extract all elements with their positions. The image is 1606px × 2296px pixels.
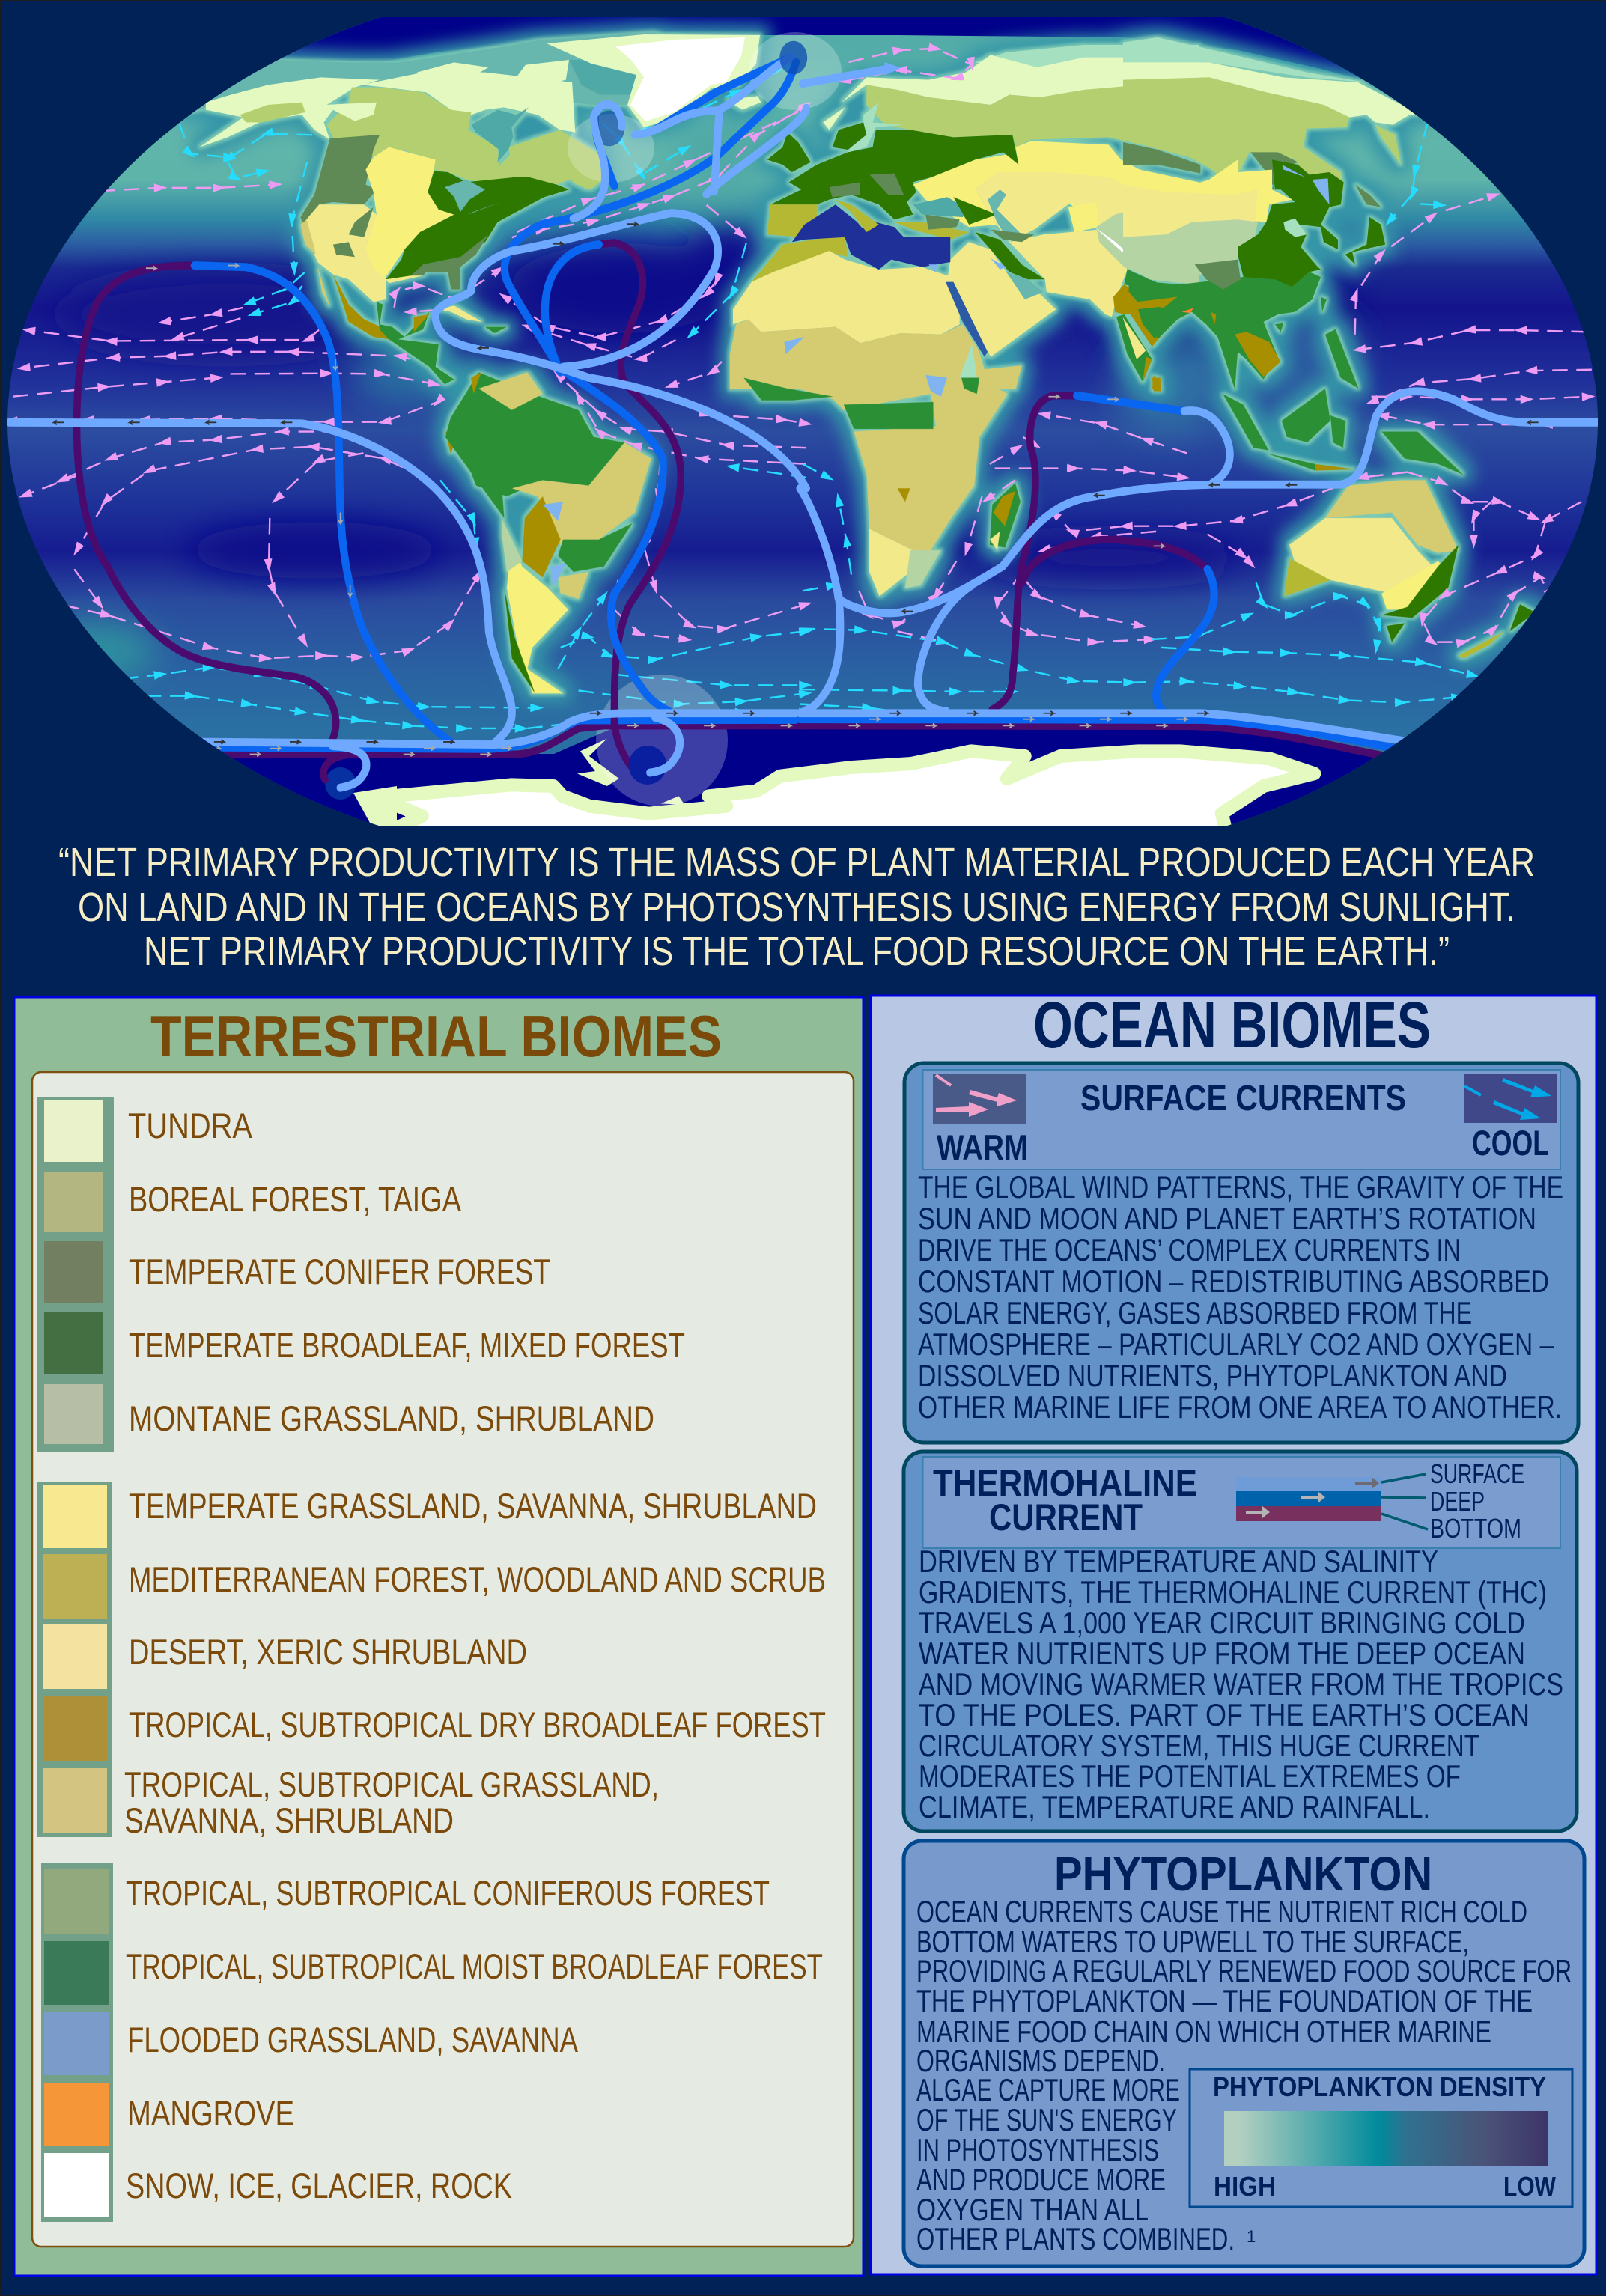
diagram: current depth layers [1236,1458,1524,1544]
panel: ocean biomes [871,989,1596,2274]
North America [187,32,676,384]
thermohaline current, west [9,41,807,800]
label: cool: COOL [1472,1123,1549,1163]
legend group: grasslands and drylands: TEMPERATE GRASSLAND, SAVANNA, SHRUBLAND [129,1486,817,1526]
text: phytoplankton body: ALGAE CAPTURE MORE [916,2072,1180,2107]
legend group: tropical, wetland and ice: SNOW, ICE, GLACIER, ROCK [126,2166,512,2205]
text: surface currents body [918,1169,1563,1425]
Greenland ice sheet and rim [547,34,760,127]
legend group: grasslands and drylands: SAVANNA, SHRUBLAND [124,1800,454,1840]
legend: phytoplankton density [1190,2069,1572,2207]
heading: thermohaline current [933,1462,1197,1538]
heading: thermohaline current: CURRENT [989,1496,1143,1538]
text: thermohaline body [919,1544,1563,1824]
legend group: tropical, wetland and ice: TROPICAL, SUBTROPICAL CONIFEROUS FOREST [126,1873,770,1913]
text: surface currents body: DRIVE THE OCEANS’ COMPLEX CURRENTS IN [918,1232,1461,1267]
diagram: current depth layers: BOTTOM [1430,1513,1521,1544]
surface currents: warm pink and cool cyan arrows, east [800,49,1592,720]
text: thermohaline body: DRIVEN BY TEMPERATURE AND SALINITY [919,1544,1438,1579]
text: phytoplankton body: OTHER PLANTS COMBINED. [916,2221,1235,2256]
card: phytoplankton [904,1841,1584,2266]
legend: phytoplankton density: PHYTOPLANKTON DENSITY [1213,2071,1546,2102]
legend group: forests and montane: MONTANE GRASSLAND, SHRUBLAND [129,1398,654,1438]
text: thermohaline body: MODERATES THE POTENTIAL EXTREMES OF [919,1758,1461,1794]
quote about net primary productivity [58,840,1535,974]
legend box [32,1072,854,2247]
heading: thermohaline current: THERMOHALINE [933,1462,1197,1504]
legend group: grasslands and drylands: TROPICAL, SUBTROPICAL GRASSLAND, [124,1764,659,1804]
text: phytoplankton body [916,1894,1572,2256]
card: surface currents [904,1063,1578,1443]
Eurasia east [1123,37,1421,389]
legend group: forests and montane: BOREAL FOREST, TAIGA [129,1179,462,1219]
text: phytoplankton body: AND PRODUCE MORE [916,2162,1166,2197]
legend group: grasslands and drylands [37,1482,826,1840]
land biomes with coastal phytoplankton glow [187,32,1536,693]
South America [445,372,651,693]
legend group: tropical, wetland and ice: MANGROVE [127,2093,294,2133]
text: phytoplankton body: OXYGEN THAN ALL [916,2192,1149,2227]
Africa south, islands and Australia [743,329,1536,658]
text: phytoplankton body: 1 [1247,2227,1256,2246]
text: phytoplankton body: OF THE SUN'S ENERGY [916,2102,1177,2137]
ocean phytoplankton density base [0,0,1606,846]
legend group: tropical, wetland and ice: TROPICAL, SUBTROPICAL MOIST BROADLEAF FOREST [126,1946,823,1986]
diagram: current depth layers: SURFACE [1430,1458,1524,1489]
text: phytoplankton body: ORGANISMS DEPEND. [916,2043,1165,2078]
legend group: grasslands and drylands: MEDITERRANEAN FOREST, WOODLAND AND SCRUB [129,1559,826,1599]
upwelling highlight circles [568,32,842,806]
heading: phytoplankton: PHYTOPLANKTON [1054,1847,1432,1901]
legend group: tropical, wetland and ice: FLOODED GRASSLAND, SAVANNA [127,2020,578,2059]
legend group: forests and montane: TEMPERATE CONIFER FOREST [129,1252,550,1291]
text: phytoplankton body: IN PHOTOSYNTHESIS [916,2132,1159,2167]
surface currents: warm pink and cool cyan arrows, west [10,64,806,728]
legend group: forests and montane: TEMPERATE BROADLEAF, MIXED FOREST [129,1325,685,1365]
heading: surface currents: SURFACE CURRENTS [1080,1079,1406,1118]
legend: phytoplankton density: HIGH [1214,2171,1276,2202]
card: thermohaline current [904,1452,1577,1831]
heading: terrestrial biomes: TERRESTRIAL BIOMES [150,1003,722,1069]
legend group: forests and montane [37,1097,685,1452]
diagram: current depth layers: DEEP [1430,1486,1485,1517]
world map: biomes and ocean currents [0,0,1606,846]
legend swatch: warm [933,1074,1028,1167]
legend group: grasslands and drylands: DESERT, XERIC SHRUBLAND [129,1632,527,1672]
text: thermohaline body: CLIMATE, TEMPERATURE AND RAINFALL. [919,1789,1430,1824]
legend group: forests and montane: TUNDRA [128,1106,253,1145]
label: warm: WARM [937,1127,1028,1167]
panel: terrestrial biomes [14,997,863,2276]
heading: ocean biomes: OCEAN BIOMES [1033,989,1431,1062]
legend: phytoplankton density: LOW [1503,2171,1556,2202]
legend swatch: cool [1464,1074,1557,1163]
thermohaline current, east [800,62,1599,755]
legend group: tropical, wetland and ice [41,1863,823,2222]
legend group: grasslands and drylands: TROPICAL, SUBTROPICAL DRY BROADLEAF FOREST [129,1705,826,1744]
Antarctica [353,739,1314,838]
Eurasia west, north Africa and Middle East [727,45,1199,389]
